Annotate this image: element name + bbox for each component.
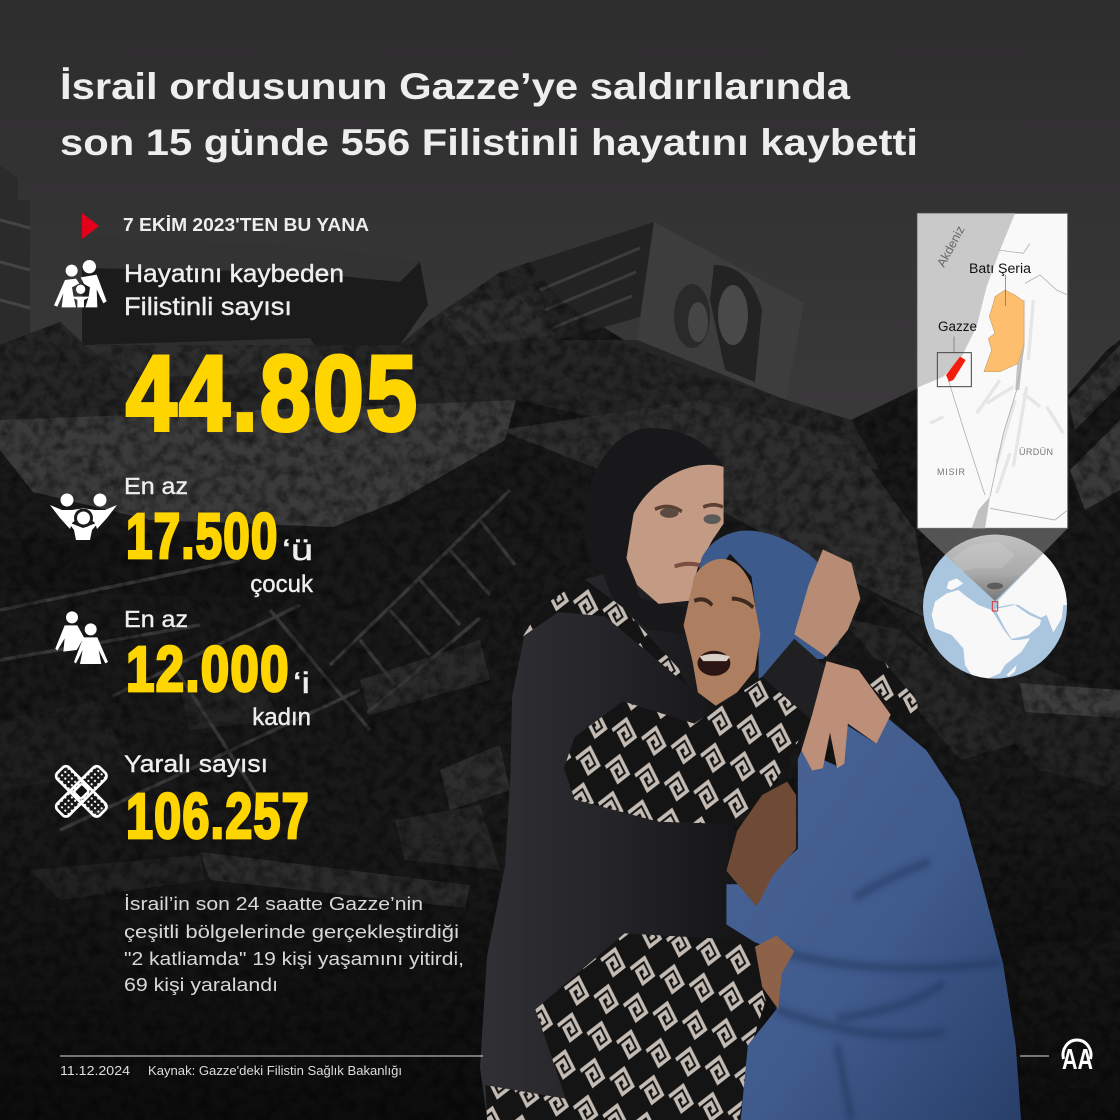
icon: bandages	[54, 764, 108, 818]
note paragraph: 69 kişi yaralandı	[124, 974, 278, 995]
footer line	[60, 1055, 1049, 1057]
note paragraph: İsrail’in son 24 saatte Gazze’nin	[124, 893, 423, 914]
number: 44.805: 44.805	[126, 334, 419, 454]
stat: children: ‘ü	[282, 534, 313, 567]
collar pattern	[523, 578, 687, 686]
patterned sleeve	[564, 677, 810, 824]
title	[60, 66, 918, 163]
icon: women	[55, 611, 108, 664]
stat: children: En az	[124, 473, 188, 499]
stat: children	[124, 473, 314, 598]
cone connector	[917, 528, 1068, 602]
map labels: Batı Şeria	[969, 261, 1032, 276]
hand on waist	[755, 936, 794, 1009]
label: killed Palestinians: Hayatını kaybeden	[124, 260, 344, 288]
globe	[923, 532, 1075, 679]
photo: two women embracing	[480, 428, 1021, 1120]
title: İsrail ordusunun Gazze’ye saldırılarında	[60, 66, 850, 107]
hand on back	[726, 782, 796, 907]
map labels: MISIR	[937, 467, 966, 477]
stat: wounded	[124, 751, 310, 853]
hand on shoulder	[801, 661, 891, 770]
note paragraph: çeşitli bölgelerinde gerçekleştirdiği	[124, 921, 459, 942]
stat: women: ‘i	[293, 667, 310, 700]
stat: women: 12.000	[126, 635, 290, 705]
West Bank	[984, 290, 1024, 372]
logo: AA: AA	[1062, 1044, 1093, 1076]
mother's face	[684, 559, 760, 706]
lower garment pattern	[485, 933, 766, 1120]
stat: children: 17.500	[126, 500, 279, 572]
footer: date and source: 11.12.2024	[60, 1064, 130, 1078]
cuff	[762, 639, 844, 719]
graffiti on wall	[674, 265, 762, 382]
blue body	[726, 715, 1021, 1120]
map labels: Akdeniz	[934, 224, 968, 269]
label: killed Palestinians	[124, 260, 344, 321]
stat: women: En az	[124, 606, 188, 632]
date heading: 7 EKİM 2023'TEN BU YANA	[123, 215, 369, 235]
stat: wounded: Yaralı sayısı	[124, 751, 268, 778]
girl's face	[626, 465, 724, 604]
blue headscarf	[691, 530, 839, 679]
icon: family	[54, 260, 107, 307]
stat: women: kadın	[252, 704, 311, 731]
stat: children: çocuk	[250, 571, 314, 598]
map	[917, 213, 1068, 528]
footer: date and source: Kaynak: Gazze'deki Filistin Sağlık Bakanlığı	[148, 1064, 402, 1078]
far sleeve	[848, 659, 917, 726]
logo: AA	[1062, 1040, 1093, 1076]
icon: children	[50, 494, 117, 540]
map labels: Gazze	[938, 319, 977, 334]
stat: wounded: 106.257	[126, 782, 310, 853]
map labels: ÜRDÜN	[1019, 447, 1053, 457]
black headscarf	[584, 428, 724, 634]
title: son 15 günde 556 Filistinli hayatını kaybetti	[60, 122, 918, 163]
note paragraph: "2 katliamda" 19 kişi yaşamını yitirdi,	[124, 948, 464, 969]
Gaza box	[937, 353, 971, 387]
map labels	[934, 224, 1053, 477]
panel: location map and globe	[917, 213, 1075, 679]
hand on scarf	[794, 549, 860, 657]
note paragraph	[124, 893, 464, 995]
label: killed Palestinians: Filistinli sayısı	[124, 293, 292, 321]
cone over globe	[943, 532, 1043, 601]
icon: red triangle marker	[82, 213, 99, 239]
stat: women	[124, 606, 311, 731]
woman in black	[480, 428, 766, 1120]
